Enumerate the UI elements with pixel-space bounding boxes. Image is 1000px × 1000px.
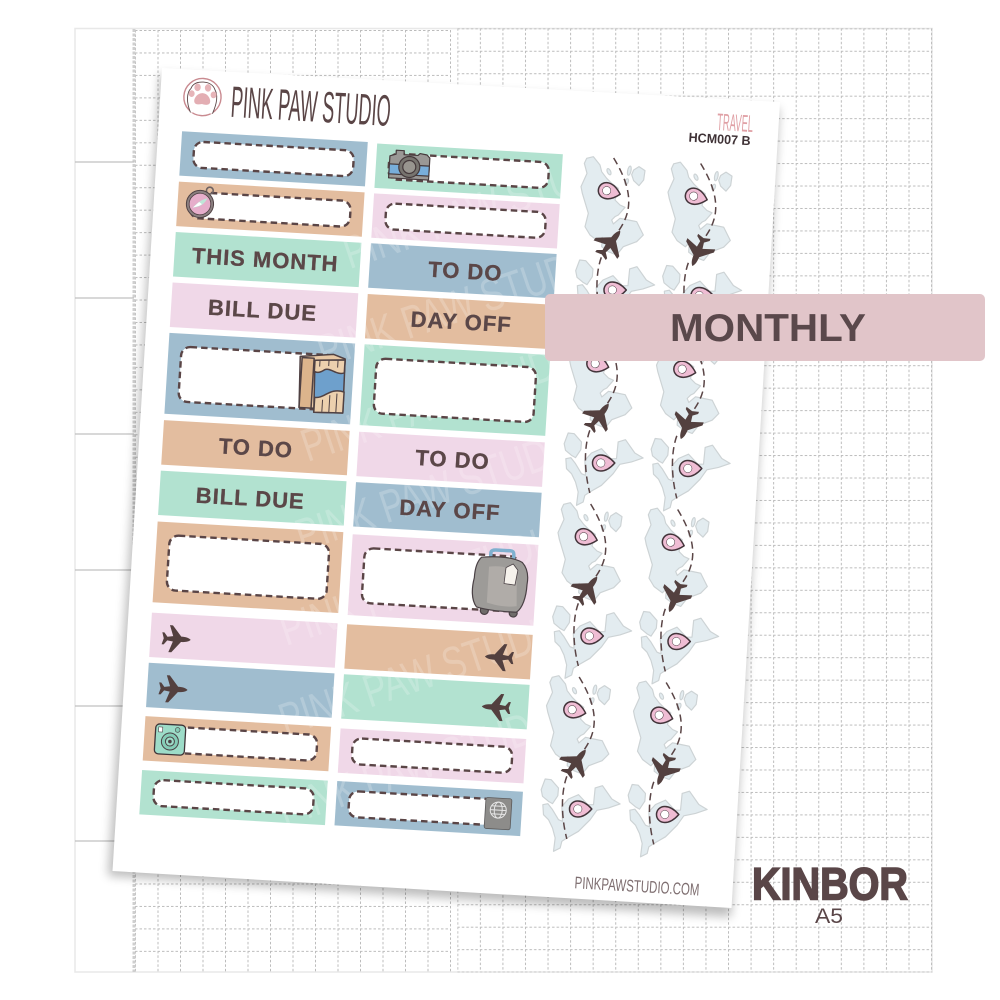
icon: instant camera — [154, 724, 186, 755]
sheet contents in rotated coordinates — [136, 75, 754, 900]
icon: suitcase — [471, 549, 529, 618]
sticker sheet — [112, 68, 780, 908]
white watermark over stickers: PINK PAW STUDIO — [337, 133, 638, 279]
label: BILL DUE: BILL DUE — [207, 295, 318, 326]
sticker box: tan with instant camera — [156, 726, 318, 761]
size label: A5: A5 — [815, 905, 843, 928]
icon: plane — [554, 740, 597, 784]
map strip: right column fourth — [628, 681, 707, 857]
icon: plane — [644, 750, 684, 791]
product code: HCM007 B — [688, 130, 751, 148]
white watermark over stickers: PINK PAW STUDIO — [272, 600, 573, 746]
white watermark over stickers: PINK PAW STUDIO — [272, 690, 573, 836]
map strip: right column top — [663, 162, 742, 338]
icon: plane — [667, 404, 707, 445]
map strip: left column third — [553, 503, 632, 678]
sticker backgrounds — [139, 131, 563, 836]
icon: plane — [678, 231, 718, 272]
sticker box: blue blank — [193, 141, 354, 177]
brand label: KINBOR: KINBOR — [752, 858, 908, 910]
label: BILL DUE left lower: BILL DUE — [195, 483, 305, 514]
sticker box: tan large — [166, 535, 330, 599]
banner: MONTHLY — [545, 294, 985, 361]
white watermark over stickers: PINK PAW STUDIO — [273, 510, 574, 656]
sticker sheet: TRAVEL — [716, 109, 754, 138]
icon: plane — [655, 577, 695, 618]
sheet contents in rotated coordinates: PINK PAW STUDIO — [229, 78, 392, 136]
sticker box: pink blank — [385, 203, 546, 238]
logo: paw badge — [183, 77, 222, 117]
map strip: left column fourth — [541, 676, 620, 851]
sticker box: pink large with suitcase — [361, 548, 520, 612]
white watermark over stickers: PINK PAW STUDIO — [310, 232, 611, 377]
sticker box: mint large — [373, 358, 536, 422]
label: DAY OFF right lower: DAY OFF — [399, 495, 501, 525]
white watermark over stickers: PINK PAW STUDIO — [289, 416, 590, 561]
icon: plane on pink — [161, 625, 192, 653]
icon: plane — [589, 221, 632, 265]
white watermark over stickers: PINK PAW STUDIO — [294, 326, 596, 471]
icon: camera — [389, 150, 430, 180]
icon: plane — [577, 394, 620, 438]
sticker box: blue with passport — [348, 791, 505, 826]
label: THIS MONTH: THIS MONTH — [191, 243, 339, 276]
label: TO DO right: TO DO — [428, 257, 503, 286]
icon: folded map — [297, 352, 346, 414]
map strip: left column second — [564, 330, 643, 505]
icon: passport — [484, 797, 512, 830]
website: PINKPAWSTUDIO.COM — [574, 873, 700, 900]
label: TO DO left: TO DO — [218, 433, 294, 463]
sticker box: blue large with map — [178, 347, 336, 410]
banner: MONTHLY: MONTHLY — [670, 307, 866, 350]
map strip: right column third — [640, 508, 719, 684]
map strip: right column second — [651, 335, 730, 511]
sticker box: mint with camera — [388, 153, 549, 188]
map strip: left column top — [576, 157, 655, 332]
label: TO DO right lower: TO DO — [415, 445, 490, 474]
icon: plane — [566, 567, 609, 611]
label: DAY OFF right: DAY OFF — [410, 307, 512, 337]
sticker box: pink blank lower — [351, 738, 513, 773]
sheet shadow — [108, 74, 779, 917]
sticker box: green blank — [153, 780, 314, 815]
white watermark over stickers — [278, 169, 560, 823]
sticker box: tan with compass — [190, 192, 351, 227]
icon: compass — [186, 186, 215, 218]
icon: plane on mint — [481, 693, 511, 722]
icon: plane on blue — [158, 675, 188, 703]
icon: plane on tan — [484, 643, 515, 672]
